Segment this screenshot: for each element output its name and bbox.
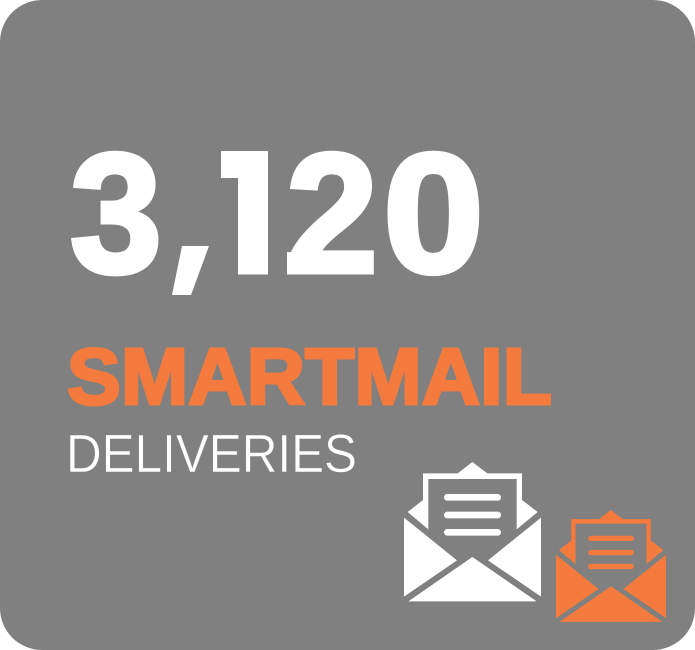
heading: delivery count: 3 <box>70 119 162 309</box>
label: DELIVERIES: DELIVERIES <box>66 424 357 484</box>
icon: white open envelope <box>404 462 541 601</box>
heading: delivery count: 2 <box>286 119 378 309</box>
label: SMARTMAIL: SMARTMAIL <box>67 332 552 421</box>
icon: orange open envelope <box>556 510 666 622</box>
heading: delivery count: 0 <box>383 119 484 309</box>
heading: delivery count: 1 <box>203 119 295 309</box>
heading: delivery count <box>70 119 484 309</box>
heading: delivery count: , <box>163 119 223 309</box>
